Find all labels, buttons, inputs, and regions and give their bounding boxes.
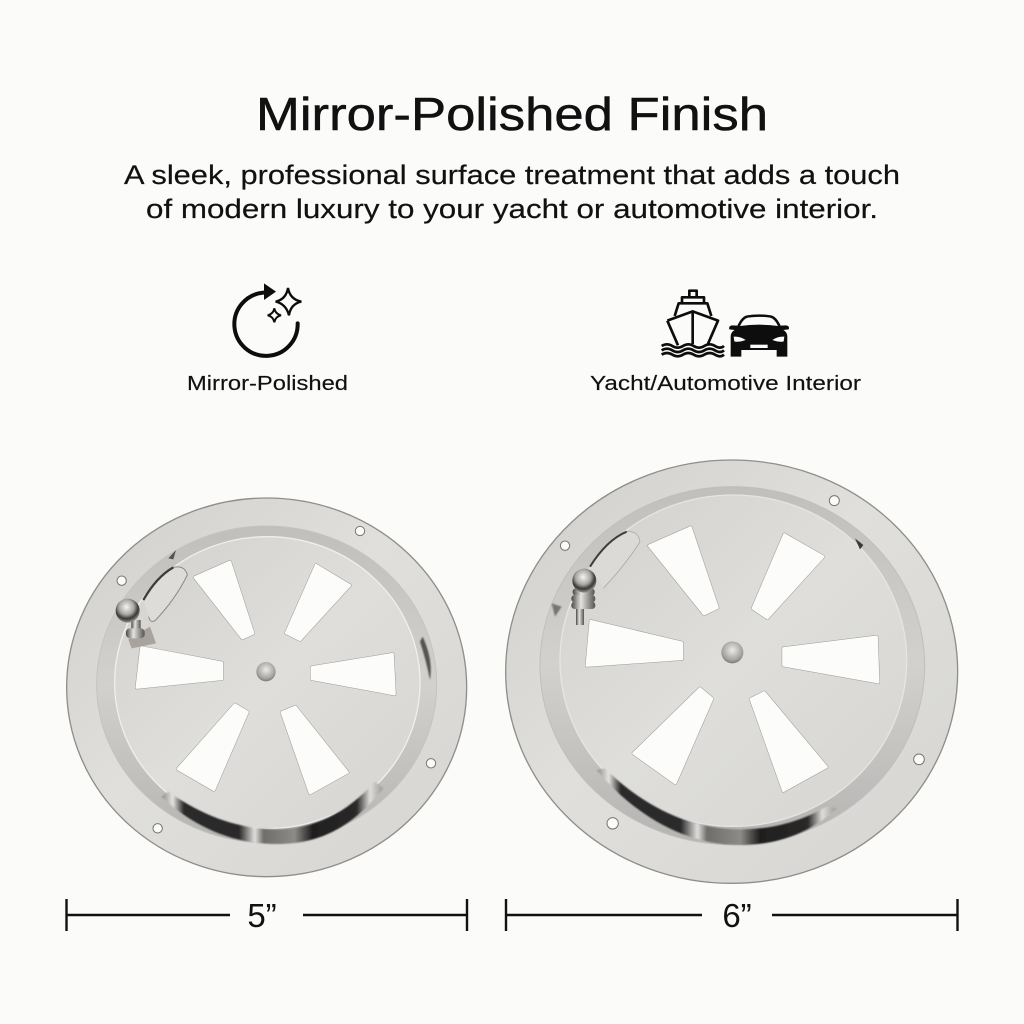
title: Mirror-Polished Finish [256,88,768,140]
centre rivet [721,641,743,663]
icon: yacht and car [662,291,789,357]
dimension: 5 inch: 5” [247,897,277,934]
label: yacht/automotive interior: Yacht/Automotive Interior [590,373,861,395]
adjuster knob [116,599,156,648]
curved adjuster slot [143,567,187,621]
dimension: 6 inch: 6” [722,897,752,934]
centre rivet [256,662,276,681]
product: 6 inch vent [506,460,958,883]
product: 5 inch vent [67,498,467,877]
vent slots [137,562,395,793]
adjuster knob [571,569,596,625]
mounting holes [560,496,924,829]
dimension: 6 inch [506,897,958,934]
icon: mirror polish circular arrow with sparkles [234,283,301,356]
curved adjuster slot [590,532,640,588]
vent slots [587,527,878,791]
subtitle [124,160,900,224]
subtitle: A sleek, professional surface treatment that adds a touch [124,160,900,190]
subtitle: of modern luxury to your yacht or automotive interior. [146,194,878,224]
mounting holes [117,526,436,833]
dimension: 5 inch [66,897,467,934]
label: mirror-polished: Mirror-Polished [187,373,348,395]
